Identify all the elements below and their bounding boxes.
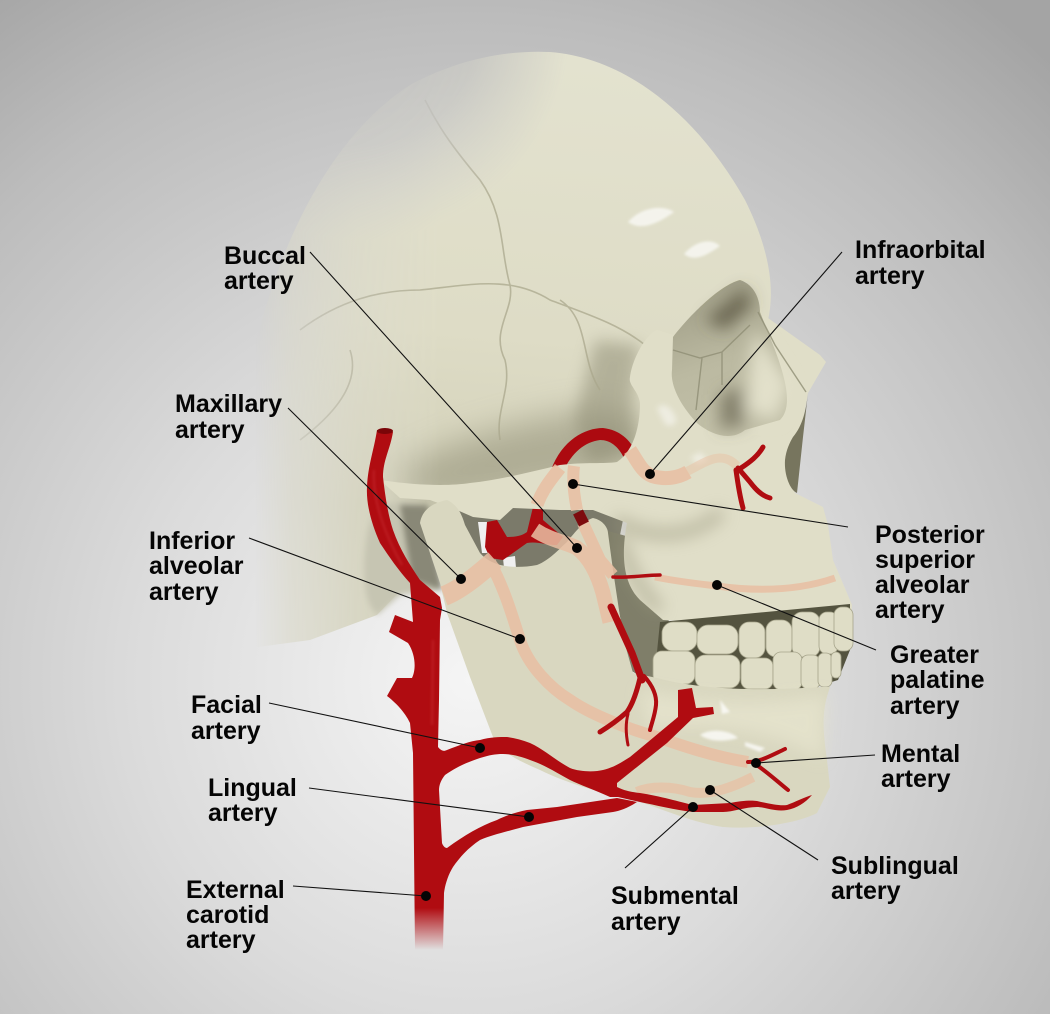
label: Inferior alveolar artery: artery bbox=[149, 578, 219, 606]
maxilla, cheekbone and arch bbox=[380, 268, 852, 645]
label: Infraorbital artery: Infraorbital bbox=[855, 236, 986, 264]
arch crossing vessel bbox=[578, 512, 584, 524]
label: Buccal artery: Buccal bbox=[224, 242, 306, 270]
label: Inferior alveolar artery: alveolar bbox=[149, 552, 244, 580]
maxilla shadow wall bbox=[605, 530, 672, 685]
label: Greater palatine artery: artery bbox=[890, 692, 960, 720]
cheek underside shadow bbox=[615, 512, 722, 610]
label: Lingual artery: artery bbox=[208, 799, 278, 827]
faded vessels inside bone bbox=[444, 450, 835, 793]
teeth backing bbox=[654, 604, 850, 692]
label: Maxillary artery: Maxillary bbox=[175, 390, 282, 418]
socket shadows bbox=[705, 288, 790, 430]
mastoid shadow bbox=[400, 505, 442, 590]
artery sheen bbox=[374, 470, 433, 725]
label: External carotid artery: artery bbox=[186, 926, 256, 954]
artery opening bbox=[377, 428, 393, 434]
label: Sublingual artery: Sublingual bbox=[831, 852, 959, 880]
chin shading bbox=[640, 690, 825, 760]
infraorbital branch bbox=[736, 447, 770, 508]
label: Greater palatine artery: palatine bbox=[890, 666, 985, 694]
label: Buccal artery: artery bbox=[224, 267, 294, 295]
sutures bbox=[300, 100, 645, 440]
label: Mental artery: Mental bbox=[881, 740, 960, 768]
external carotid, facial and lingual arteries bbox=[367, 430, 812, 950]
skull illustration bbox=[238, 52, 853, 950]
cranium bbox=[238, 52, 771, 648]
mastoid region bbox=[364, 502, 440, 615]
label: Mental artery: artery bbox=[881, 765, 951, 793]
label: External carotid artery: carotid bbox=[186, 901, 269, 929]
label: Posterior superior alveolar artery: alveolar bbox=[875, 571, 970, 599]
label: Posterior superior alveolar artery: superior bbox=[875, 546, 975, 574]
buccal artery bbox=[600, 447, 788, 790]
mandible bbox=[420, 500, 830, 828]
eye socket bbox=[672, 280, 787, 436]
forehead highlights bbox=[628, 208, 720, 258]
label: Facial artery: artery bbox=[191, 717, 261, 745]
chin highlights bbox=[700, 700, 765, 752]
label: Posterior superior alveolar artery: artery bbox=[875, 596, 945, 624]
nasal opening bbox=[785, 393, 808, 493]
holes in the skull bbox=[478, 522, 516, 568]
label: Greater palatine artery: Greater bbox=[890, 641, 979, 669]
arch shadow on cranium bbox=[400, 410, 640, 500]
label: Sublingual artery: artery bbox=[831, 877, 901, 905]
maxillary artery, deep part bbox=[485, 428, 636, 560]
label: Maxillary artery: artery bbox=[175, 416, 245, 444]
label: Submental artery: artery bbox=[611, 908, 681, 936]
label: Lingual artery: Lingual bbox=[208, 774, 297, 802]
leader lines bbox=[249, 252, 876, 896]
label: Infraorbital artery: artery bbox=[855, 262, 925, 290]
mental artery bbox=[748, 749, 788, 790]
label: Submental artery: Submental bbox=[611, 882, 739, 910]
label: Facial artery: Facial bbox=[191, 691, 262, 719]
teeth bbox=[653, 604, 853, 692]
temple shadow bbox=[575, 340, 640, 465]
cheekbone highlights bbox=[657, 405, 708, 464]
label: External carotid artery: External bbox=[186, 876, 285, 904]
space behind the jaw bbox=[445, 505, 625, 575]
label: Inferior alveolar artery: Inferior bbox=[149, 527, 235, 555]
socket sutures bbox=[673, 312, 806, 410]
greater palatine artery bbox=[613, 575, 660, 577]
label: Posterior superior alveolar artery: Posterior bbox=[875, 521, 985, 549]
marker dots bbox=[421, 469, 761, 901]
